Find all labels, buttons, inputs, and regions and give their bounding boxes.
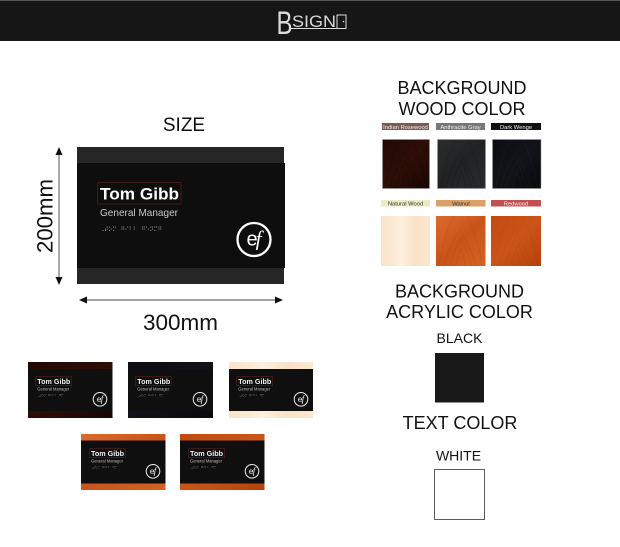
heading: background acrylic color [386,282,533,322]
swatch: Natural Wood [381,200,430,266]
swatch: Walnut [436,200,486,266]
thumbnail: rosewood: ef [97,394,105,404]
thumbnail: rosewood: Tom Gibb [37,377,71,386]
swatch: Indian Rosewood: Indian Rosewood [383,125,428,131]
heading: background acrylic color: BACKGROUND [395,282,524,302]
swatch: Redwood: Redwood [504,202,528,208]
thumbnail: redwood: ef [249,466,257,476]
heading: text color: TEXT COLOR [403,413,517,433]
thumbnail: rosewood: General Manager [37,386,70,391]
logo: ef: ef [247,226,265,250]
thumbnail: natural wood: ⠠⠞⠕⠍⠀⠛⠊⠃⠃⠀⠛⠍ [238,393,265,398]
header bar [0,0,620,41]
heading: background acrylic color: ACRYLIC COLOR [386,302,533,322]
thumbnail: rosewood: ⠠⠞⠕⠍⠀⠛⠊⠃⠃⠀⠛⠍ [37,393,64,398]
braille: ⠠⠞⠕⠍⠀⠛⠊⠃⠃⠀⠛⠑⠝⠍⠛ [100,226,162,234]
swatch: Dark Wenge: Dark Wenge [500,125,532,131]
heading: background wood color [397,78,527,119]
swatch: Dark Wenge [491,123,541,188]
label: white: WHITE [436,448,481,464]
swatch: black acrylic [435,353,484,402]
main sign [77,147,285,284]
thumbnail: dark wenge: ef [197,394,205,404]
arrow: width dimension [79,296,283,304]
thumbnail: natural wood: General Manager [238,386,271,391]
highlighted name: Tom Gibb [100,184,179,203]
arrow: height dimension [56,147,62,285]
thumbnail: dark wenge [128,362,213,418]
thumbnail: walnut: General Manager [91,458,124,463]
logo: BSIGN [276,5,346,41]
label: 200mm: 200mm [32,179,58,253]
thumbnail: natural wood: ef [298,394,306,404]
heading: background wood color: BACKGROUND [397,78,527,98]
swatch: Indian Rosewood [382,123,430,188]
thumbnail: rosewood [28,362,112,418]
logo: ef [238,223,270,256]
thumbnail: walnut: Tom Gibb [91,449,124,458]
swatch: white text [434,470,484,520]
swatch: Anthracite Gray: Anthracite Gray [440,125,481,131]
thumbnail: redwood: ⠠⠞⠕⠍⠀⠛⠊⠃⠃⠀⠛⠍ [190,465,216,470]
thumbnail: natural wood: Tom Gibb [238,377,272,386]
thumbnail: redwood: General Manager [190,458,223,463]
thumbnail: walnut [81,434,166,490]
thumbnail: redwood [180,434,264,490]
thumbnail: redwood: Tom Gibb [190,449,223,458]
heading: size: SIZE [163,115,205,136]
job title: General Manager [100,207,178,219]
swatch: Anthracite Gray [436,123,486,188]
swatch: Walnut: Walnut [452,202,470,208]
label: black: BLACK [437,330,483,346]
heading: background wood color: WOOD COLOR [398,99,526,119]
label: 300mm: 300mm [143,310,218,335]
thumbnail: dark wenge: Tom Gibb [137,377,171,386]
logo: BSIGN: SIGN [292,13,336,31]
thumbnail: natural wood [229,362,313,418]
thumbnail: dark wenge: General Manager [137,386,170,391]
thumbnail: walnut: ⠠⠞⠕⠍⠀⠛⠊⠃⠃⠀⠛⠍ [91,465,117,470]
logo: BSIGN: B [276,5,292,41]
swatch: Redwood [491,200,541,266]
swatch: Natural Wood: Natural Wood [388,202,423,208]
thumbnail: walnut: ef [150,466,158,476]
thumbnail: dark wenge: ⠠⠞⠕⠍⠀⠛⠊⠃⠃⠀⠛⠍ [137,393,164,398]
